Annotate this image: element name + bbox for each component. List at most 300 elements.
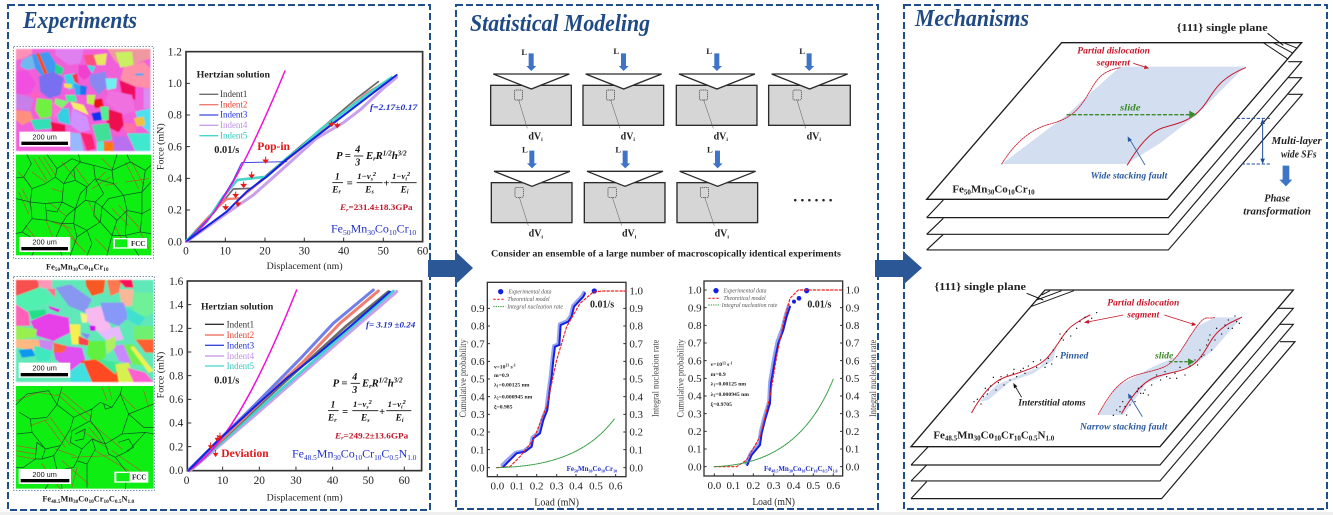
parameters: ν=10 — [711, 362, 722, 368]
chart: cumulative probability Fe50Mn30Co10Cr10: 0.7 — [629, 338, 644, 350]
formulas: s — [370, 176, 374, 182]
slide arrow — [1067, 103, 1197, 119]
schematic 3 — [676, 46, 757, 143]
wide stacking fault label — [1091, 136, 1168, 181]
chart: cumulative probability Fe50Mn30Co10Cr10: 10 — [613, 468, 617, 473]
narrow stacking fault label — [1079, 393, 1168, 432]
phase transformation arrow: transformation — [1243, 206, 1311, 217]
parameters: =0.000945 nm — [715, 392, 749, 398]
alloy label: Cr — [1015, 184, 1028, 196]
chart: force vs displacement Fe50Mn30Co10Cr10: f=2.17±0.17 — [370, 102, 418, 112]
chart: cumulative probability Fe48.5Mn30Co10Cr10C0.5N1.0: 0.2 — [746, 480, 760, 492]
scale bar: 200 um — [32, 133, 57, 142]
chart: force vs displacement Fe50Mn30Co10Cr10: 1.0 — [168, 78, 182, 90]
chart: cumulative probability Fe50Mn30Co10Cr10: 0.2 — [629, 427, 643, 439]
schematic 6: dV — [622, 229, 635, 240]
chart: force vs displacement Fe48.5Mn30Co10Cr10C0.5N1.0: r — [341, 436, 344, 442]
chart: force vs displacement Fe50Mn30Co10Cr10: 50 — [343, 228, 351, 237]
chart: cumulative probability Fe50Mn30Co10Cr10: 0.4 — [569, 481, 583, 493]
parameters: 13 — [722, 361, 726, 365]
formulas: + — [379, 407, 385, 418]
chart: cumulative probability Fe50Mn30Co10Cr10: 10 — [601, 468, 605, 473]
phase map — [16, 386, 154, 489]
stacking fault areas — [980, 317, 1242, 415]
schematic 7: i — [727, 234, 729, 240]
chart: force vs displacement Fe48.5Mn30Co10Cr10C0.5N1.0: Displacement (nm) — [267, 493, 343, 504]
chart: force vs displacement Fe48.5Mn30Co10Cr10C0.5N1.0: 20 — [254, 475, 265, 487]
schematic 2: i — [633, 137, 635, 143]
interstitial atoms — [974, 313, 1239, 415]
heading: Statistical Modeling: Statistical Modeling — [470, 11, 650, 37]
chart: force vs displacement Fe48.5Mn30Co10Cr10C0.5N1.0: 0 — [184, 475, 190, 487]
chart: force vs displacement Fe48.5Mn30Co10Cr10C0.5N1.0: 50 — [363, 475, 374, 487]
chart: cumulative probability Fe48.5Mn30Co10Cr10C0.5N1.0: 0.8 — [846, 320, 860, 332]
caption: 0.5 — [115, 499, 122, 505]
chart: cumulative probability Fe48.5Mn30Co10Cr10C0.5N1.0: Cumulative probability — [675, 339, 685, 417]
formulas: E — [365, 185, 372, 195]
legend: Indent2 — [220, 99, 247, 109]
parameters: 1 — [713, 383, 715, 387]
legend: Indent1 — [220, 89, 247, 99]
formulas: 1/2 — [383, 149, 392, 157]
formulas: + — [383, 179, 389, 190]
formulas: 4 — [354, 145, 360, 156]
chart: cumulative probability Fe50Mn30Co10Cr10: 0.2 — [530, 481, 544, 493]
chart: cumulative probability Fe50Mn30Co10Cr10: Fe — [567, 465, 574, 473]
chart: cumulative probability Fe48.5Mn30Co10Cr10C0.5N1.0: 0.5 — [806, 480, 821, 492]
legend: Indent4 — [220, 120, 248, 130]
stacked planes — [927, 43, 1302, 250]
chart: cumulative probability Fe48.5Mn30Co10Cr10C0.5N1.0: 30 — [789, 468, 793, 473]
chart: cumulative probability Fe48.5Mn30Co10Cr10C0.5N1.0: Load (mN) — [752, 497, 795, 508]
schematic 1 — [491, 47, 571, 143]
schematic 4: i — [819, 137, 821, 143]
chart: force vs displacement Fe50Mn30Co10Cr10 — [46, 46, 429, 273]
formulas — [331, 145, 417, 196]
formulas: R — [371, 378, 379, 389]
chart: force vs displacement Fe50Mn30Co10Cr10: r — [346, 207, 349, 213]
chart: force vs displacement Fe50Mn30Co10Cr10: 30 — [367, 228, 375, 237]
stacked planes — [911, 290, 1295, 499]
chart: cumulative probability Fe48.5Mn30Co10Cr10C0.5N1.0: 0.0 — [707, 480, 722, 492]
chart: force vs displacement Fe50Mn30Co10Cr10: 20 — [259, 246, 271, 258]
chart: force vs displacement Fe48.5Mn30Co10Cr10C0.5N1.0: 30 — [333, 453, 341, 462]
chart: force vs displacement Fe48.5Mn30Co10Cr10C0.5N1.0: =249.2±13.6GPa — [344, 431, 409, 440]
alloy label: Co — [981, 429, 995, 441]
alloy label: 10 — [1028, 189, 1035, 197]
chart: cumulative probability Fe50Mn30Co10Cr10 — [458, 282, 661, 509]
chart: force vs displacement Fe50Mn30Co10Cr10: 0.8 — [168, 110, 182, 122]
formulas: i — [407, 190, 409, 196]
alloy label: 10 — [994, 434, 1002, 442]
chart: force vs displacement Fe50Mn30Co10Cr10: 10 — [409, 228, 416, 237]
chart: force vs displacement Fe50Mn30Co10Cr10: 0.01/s — [214, 145, 239, 156]
chart: force vs displacement Fe48.5Mn30Co10Cr10C0.5N1.0: 10 — [217, 475, 229, 487]
schematic 6: i — [635, 234, 637, 240]
caption: Mn — [60, 494, 73, 503]
legend — [493, 289, 563, 311]
chart: force vs displacement Fe50Mn30Co10Cr10: Fe — [331, 221, 343, 235]
chart: force vs displacement Fe50Mn30Co10Cr10: 50 — [378, 246, 389, 258]
formulas: i — [405, 176, 407, 182]
formulas: 2 — [406, 171, 411, 178]
alloy label: 50 — [964, 189, 971, 197]
parameters: λ — [494, 383, 497, 389]
chart: force vs displacement Fe50Mn30Co10Cr10: Displacement (nm) — [267, 261, 343, 272]
chart: force vs displacement Fe50Mn30Co10Cr10: Co — [375, 221, 389, 235]
diagram: narrow stacking fault mechanism — [911, 281, 1295, 499]
EBSD maps: Fe50Mn30Co10Cr10 — [14, 46, 154, 258]
schematic 5: dV — [529, 229, 541, 240]
chart: force vs displacement Fe50Mn30Co10Cr10: 10 — [220, 246, 231, 258]
chart: cumulative probability Fe48.5Mn30Co10Cr10C0.5N1.0: 1.0 — [833, 468, 838, 473]
formulas — [327, 372, 411, 424]
legend: Hertzian solution — [197, 70, 271, 81]
formulas: 1−v — [392, 171, 405, 181]
chart: cumulative probability Fe48.5Mn30Co10Cr10C0.5N1.0: 0.4 — [787, 480, 801, 492]
chart: cumulative probability Fe48.5Mn30Co10Cr10C0.5N1.0: Co — [793, 465, 802, 473]
legend: FCC — [19, 237, 147, 252]
parameters: =0.00125 nm — [499, 383, 530, 389]
pinned label: Pinned — [1060, 351, 1088, 362]
panel: statistical modeling — [456, 5, 878, 509]
chart: cumulative probability Fe50Mn30Co10Cr10: Load (mN) — [534, 498, 579, 509]
alloy label: 1.0 — [1045, 434, 1055, 442]
chart: cumulative probability Fe50Mn30Co10Cr10: 0.1 — [471, 444, 485, 456]
parameters: m=0.9 — [711, 372, 726, 378]
caption: Fe — [42, 494, 51, 503]
parameters: =0.000945 nm — [499, 394, 533, 400]
parameters: ξ=0.9705 — [711, 401, 732, 409]
alloy label: Co — [994, 184, 1008, 196]
chart: force vs displacement Fe48.5Mn30Co10Cr10C0.5N1.0: E — [334, 431, 342, 440]
chart: cumulative probability Fe48.5Mn30Co10Cr10C0.5N1.0: 0.0 — [688, 461, 702, 473]
single plane label — [934, 281, 1043, 300]
caption: C — [109, 494, 115, 503]
formulas: r — [334, 418, 337, 424]
chart: cumulative probability Fe48.5Mn30Co10Cr10C0.5N1.0: 0.2 — [688, 426, 702, 438]
chart: force vs displacement Fe48.5Mn30Co10Cr10C0.5N1.0: 40 — [327, 475, 339, 487]
formulas: h — [392, 151, 398, 162]
chart: force vs displacement Fe48.5Mn30Co10Cr10C0.5N1.0: Deviation — [221, 448, 269, 460]
narrow stacking fault label: Narrow stacking fault — [1079, 422, 1168, 432]
legend — [197, 70, 271, 140]
parameters: λ — [494, 394, 497, 400]
chart: cumulative probability Fe48.5Mn30Co10Cr10C0.5N1.0: 0.6 — [826, 480, 841, 492]
schematic 2 — [583, 46, 664, 143]
formulas: R — [375, 151, 383, 162]
partial dislocation label — [1084, 298, 1196, 326]
legend: FCC — [19, 469, 148, 484]
wide stacking fault label: Wide stacking fault — [1091, 171, 1168, 181]
chart: force vs displacement Fe48.5Mn30Co10Cr10C0.5N1.0: Mn — [317, 447, 333, 461]
panel: mechanisms — [904, 5, 1327, 509]
chart: cumulative probability Fe48.5Mn30Co10Cr10C0.5N1.0: 0.2 — [846, 426, 859, 438]
schematic 6: L — [615, 144, 621, 154]
formulas: E — [396, 414, 402, 424]
single plane label — [1177, 22, 1283, 45]
slide arrow — [1154, 350, 1195, 365]
chart: cumulative probability Fe50Mn30Co10Cr10: 0.9 — [471, 303, 485, 315]
formulas: E — [328, 414, 334, 424]
legend: FCC: FCC — [131, 240, 145, 248]
chart: force vs displacement Fe48.5Mn30Co10Cr10C0.5N1.0: 0.6 — [169, 394, 184, 406]
schematic 6 — [584, 144, 665, 240]
chart: cumulative probability Fe48.5Mn30Co10Cr10C0.5N1.0: 0.9 — [846, 302, 860, 314]
chart: cumulative probability Fe50Mn30Co10Cr10: 0.5 — [471, 374, 485, 386]
chart: cumulative probability Fe48.5Mn30Co10Cr10C0.5N1.0: 0.8 — [688, 320, 702, 332]
formulas: = — [347, 179, 353, 190]
chart: cumulative probability Fe48.5Mn30Co10Cr10C0.5N1.0: 0.7 — [688, 338, 702, 350]
chart: cumulative probability Fe48.5Mn30Co10Cr10C0.5N1.0: N — [828, 465, 833, 473]
formulas: i — [402, 418, 404, 424]
alloy label: 48.5 — [945, 434, 958, 442]
chart: force vs displacement Fe48.5Mn30Co10Cr10C0.5N1.0: C — [381, 447, 389, 461]
partial dislocation lines — [1002, 68, 1246, 165]
chart: force vs displacement Fe50Mn30Co10Cr10: 40 — [338, 246, 350, 258]
single plane label: {111} single plane — [1177, 22, 1268, 34]
legend: Theoretical model — [723, 296, 766, 302]
formulas: P = — [333, 378, 347, 389]
chart: cumulative probability Fe50Mn30Co10Cr10: 0.8 — [629, 321, 644, 333]
caption: 30 — [73, 499, 79, 505]
caption: 50 — [55, 267, 60, 273]
chart: force vs displacement Fe50Mn30Co10Cr10: 10 — [389, 228, 397, 237]
formulas: r — [369, 383, 372, 390]
legend: Indent3 — [227, 340, 255, 350]
schematic 5 — [491, 144, 572, 240]
formulas: 1 — [335, 172, 340, 182]
multi-layer bracket: Multi-layer — [1271, 136, 1322, 147]
multi-layer bracket — [1237, 118, 1322, 164]
chart: cumulative probability Fe50Mn30Co10Cr10: 0.9 — [629, 303, 644, 315]
schematic 7: L — [707, 144, 713, 154]
chart: force vs displacement Fe48.5Mn30Co10Cr10C0.5N1.0: f= 3.19 ±0.24 — [366, 320, 416, 330]
caption: N — [122, 494, 128, 503]
chart: cumulative probability Fe50Mn30Co10Cr10: 0.3 — [629, 409, 644, 421]
chart: force vs displacement Fe50Mn30Co10Cr10: 60 — [417, 246, 429, 258]
chart: cumulative probability Fe50Mn30Co10Cr10: 0.1 — [510, 481, 524, 493]
inverse pole figure map — [16, 49, 150, 151]
alloy label: 10 — [1008, 189, 1015, 197]
formulas: 1−v — [388, 399, 401, 409]
diagram: wide stacking fault mechanism — [927, 22, 1322, 250]
chart: force vs displacement Fe50Mn30Co10Cr10: 1.2 — [168, 46, 182, 58]
formulas: 1 — [331, 400, 335, 410]
caption: Mn — [60, 262, 73, 271]
alloy label: Fe — [952, 184, 964, 196]
chart: cumulative probability Fe48.5Mn30Co10Cr10C0.5N1.0: 0.4 — [846, 391, 860, 403]
partial dislocation label — [1077, 45, 1150, 69]
schematic 3: L — [706, 46, 712, 56]
formulas: 1/2 — [379, 377, 388, 385]
partial dislocation lines — [972, 315, 1242, 414]
schematic 5: L — [522, 144, 528, 154]
legend: FCC: 200 um — [32, 470, 57, 479]
chart: force vs displacement Fe48.5Mn30Co10Cr10C0.5N1.0: 0.8 — [169, 370, 184, 382]
inverse pole figure map — [16, 280, 154, 382]
legend: Indent3 — [220, 110, 248, 120]
alloy label: C — [1021, 429, 1029, 441]
schematic 4: L — [799, 46, 805, 56]
chart: cumulative probability Fe50Mn30Co10Cr10: 0.4 — [471, 391, 485, 403]
legend: Indent1 — [227, 319, 254, 329]
chart: force vs displacement Fe48.5Mn30Co10Cr10C0.5N1.0: Co — [341, 447, 355, 461]
pop-in arrows — [223, 121, 340, 210]
caption: 10 — [88, 267, 94, 273]
chart: cumulative probability Fe48.5Mn30Co10Cr10C0.5N1.0: 0.1 — [846, 444, 859, 456]
alloy label: 30 — [974, 434, 981, 442]
chart: cumulative probability Fe50Mn30Co10Cr10: 0.6 — [609, 481, 623, 493]
chart: cumulative probability Fe48.5Mn30Co10Cr10C0.5N1.0: 0.9 — [688, 302, 702, 314]
chart: force vs displacement Fe48.5Mn30Co10Cr10C0.5N1.0: 0.2 — [169, 441, 184, 453]
slide arrow: slide — [1119, 103, 1141, 114]
chart: force vs displacement Fe48.5Mn30Co10Cr10C0.5N1.0: 10 — [355, 453, 362, 462]
formulas: = — [342, 407, 348, 418]
chart: cumulative probability Fe50Mn30Co10Cr10: 0.0 — [471, 462, 485, 474]
formulas: 2 — [372, 171, 377, 178]
heading: Mechanisms: Mechanisms — [914, 6, 1029, 32]
legend: Theoretical model — [507, 297, 550, 303]
caption: 1.0 — [128, 499, 135, 505]
parameters: s — [509, 364, 513, 370]
chart: cumulative probability Fe50Mn30Co10Cr10: 0.6 — [629, 356, 644, 368]
chart: force vs displacement Fe48.5Mn30Co10Cr10C0.5N1.0: 1.2 — [169, 323, 184, 335]
alloy label: Mn — [957, 429, 974, 441]
caption: 10 — [104, 499, 109, 505]
chart: cumulative probability Fe48.5Mn30Co10Cr10C0.5N1.0: 0.0 — [846, 461, 860, 473]
chart: force vs displacement Fe48.5Mn30Co10Cr10C0.5N1.0: 1.0 — [407, 453, 417, 462]
legend — [201, 302, 274, 371]
chart: force vs displacement Fe50Mn30Co10Cr10: Pop-in — [257, 141, 291, 153]
parameters: λ — [711, 381, 713, 387]
legend: Indent5 — [220, 130, 248, 140]
phase transformation arrow: Phase — [1264, 193, 1291, 204]
chart: cumulative probability Fe48.5Mn30Co10Cr10C0.5N1.0 — [675, 281, 878, 508]
parameters: 2 — [497, 396, 499, 400]
chart: force vs displacement Fe48.5Mn30Co10Cr10C0.5N1.0: 30 — [290, 475, 302, 487]
chart: cumulative probability Fe48.5Mn30Co10Cr10C0.5N1.0: 0.3 — [767, 480, 781, 492]
chart: force vs displacement Fe48.5Mn30Co10Cr10C0.5N1.0: 10 — [374, 453, 382, 462]
formulas: P = — [336, 151, 351, 162]
chart: force vs displacement Fe48.5Mn30Co10Cr10C0.5N1.0: 60 — [399, 475, 410, 487]
caption: 48.5 — [51, 499, 61, 505]
caption: Cr — [93, 262, 103, 271]
parameters — [710, 361, 749, 409]
alloy label: 30 — [987, 189, 995, 197]
EBSD maps: Fe48.5Mn30Co10Cr10C0.5N1.0 — [14, 276, 154, 490]
slide arrow: slide — [1154, 350, 1173, 360]
schematic 1: i — [541, 137, 543, 143]
chart: cumulative probability Fe50Mn30Co10Cr10: 0.01/s — [590, 300, 614, 311]
caption: 10 — [88, 499, 94, 505]
chart: force vs displacement Fe50Mn30Co10Cr10: 0.0 — [168, 236, 182, 248]
interstitial atoms label — [1013, 383, 1086, 408]
caption: Co — [78, 262, 88, 271]
schematic 2: dV — [621, 131, 633, 142]
chart: cumulative probability Fe48.5Mn30Co10Cr10C0.5N1.0: 0.1 — [688, 444, 702, 456]
chart: cumulative probability Fe48.5Mn30Co10Cr10C0.5N1.0: 0.5 — [688, 373, 702, 385]
formulas: E — [401, 185, 407, 195]
parameters: λ — [711, 392, 713, 398]
chart: cumulative probability Fe50Mn30Co10Cr10: 0.7 — [471, 338, 485, 350]
legend: Indent5 — [227, 361, 255, 371]
multi-layer bracket: wide SFs — [1281, 149, 1317, 160]
chart: force vs displacement Fe50Mn30Co10Cr10: 30 — [299, 246, 310, 258]
formulas: 1−v — [357, 171, 371, 181]
formulas: s — [366, 418, 370, 424]
alloy label: 10 — [1014, 434, 1021, 442]
formulas: i — [401, 404, 403, 410]
chart: force vs displacement Fe50Mn30Co10Cr10: 0.6 — [168, 141, 182, 153]
schematic 7 — [677, 144, 758, 240]
caption: 10 — [103, 267, 109, 273]
chart: cumulative probability Fe50Mn30Co10Cr10: 0.8 — [471, 321, 485, 333]
heading: Experiments: Experiments — [22, 8, 137, 34]
parameters: ν=10 — [494, 364, 505, 370]
legend: Experimental data — [507, 289, 552, 295]
formulas: 3 — [354, 158, 360, 169]
caption: 30 — [73, 267, 78, 273]
schematic 4 — [769, 46, 850, 143]
parameters: 13 — [505, 364, 509, 368]
partial dislocation label: Partial dislocation — [1107, 298, 1179, 308]
interstitial atoms label: Interstitial atoms — [1017, 398, 1086, 408]
chart: cumulative probability Fe50Mn30Co10Cr10: Cr — [605, 465, 613, 473]
schematic 5: i — [541, 234, 543, 240]
deviation arrows — [209, 433, 222, 456]
ellipsis: ...... — [793, 188, 833, 205]
chart: force vs displacement Fe50Mn30Co10Cr10: Mn — [351, 221, 367, 235]
chart: force vs displacement Fe48.5Mn30Co10Cr10C0.5N1.0: 0.5 — [389, 453, 399, 462]
chart: cumulative probability Fe50Mn30Co10Cr10: Co — [592, 465, 602, 473]
caption: Fe — [46, 262, 55, 271]
parameters: 1 — [497, 385, 499, 389]
formulas: E — [366, 151, 373, 162]
chart: force vs displacement Fe48.5Mn30Co10Cr10C0.5N1.0: Force (mN) — [156, 352, 167, 398]
chart: cumulative probability Fe50Mn30Co10Cr10: 0.3 — [471, 409, 485, 421]
indentation schematics — [491, 46, 850, 260]
parameters: 2 — [713, 394, 715, 398]
chart: cumulative probability Fe50Mn30Co10Cr10: Cumulative probability — [458, 339, 468, 417]
chart: cumulative probability Fe50Mn30Co10Cr10: 0.4 — [629, 391, 644, 403]
formulas: 4 — [351, 372, 357, 383]
formulas: 1−v — [353, 399, 366, 409]
alloy label: Mn — [971, 184, 987, 196]
chart: force vs displacement Fe50Mn30Co10Cr10: 0.4 — [168, 173, 182, 185]
parameters: ξ=0.985 — [494, 403, 513, 411]
chart: cumulative probability Fe48.5Mn30Co10Cr10C0.5N1.0: Mn — [778, 465, 789, 473]
formulas: s — [371, 190, 375, 196]
alloy label: N — [1038, 429, 1046, 441]
ensemble caption: Consider an ensemble of a large number of macroscopically identical experiments — [491, 249, 841, 260]
alloy label: 0.5 — [1029, 434, 1038, 442]
chart: cumulative probability Fe50Mn30Co10Cr10: 0.5 — [589, 481, 603, 493]
chart: cumulative probability Fe48.5Mn30Co10Cr10C0.5N1.0: 0.6 — [846, 355, 860, 367]
formulas: 2 — [368, 399, 373, 406]
parameters: s — [726, 362, 730, 368]
partial dislocation label: Partial dislocation — [1077, 45, 1150, 55]
legend: Indent2 — [227, 330, 254, 340]
parameters — [493, 364, 533, 411]
partial dislocation label: segment — [1126, 310, 1160, 320]
chart: cumulative probability Fe48.5Mn30Co10Cr10C0.5N1.0: 0.5 — [823, 468, 828, 473]
chart: force vs displacement Fe48.5Mn30Co10Cr10C0.5N1.0: 48.5 — [304, 453, 317, 462]
caption: Co — [78, 494, 88, 503]
schematic 3: i — [726, 137, 728, 143]
legend: Experimental data — [722, 289, 767, 295]
chart: cumulative probability Fe48.5Mn30Co10Cr10C0.5N1.0: 0.7 — [846, 338, 860, 350]
